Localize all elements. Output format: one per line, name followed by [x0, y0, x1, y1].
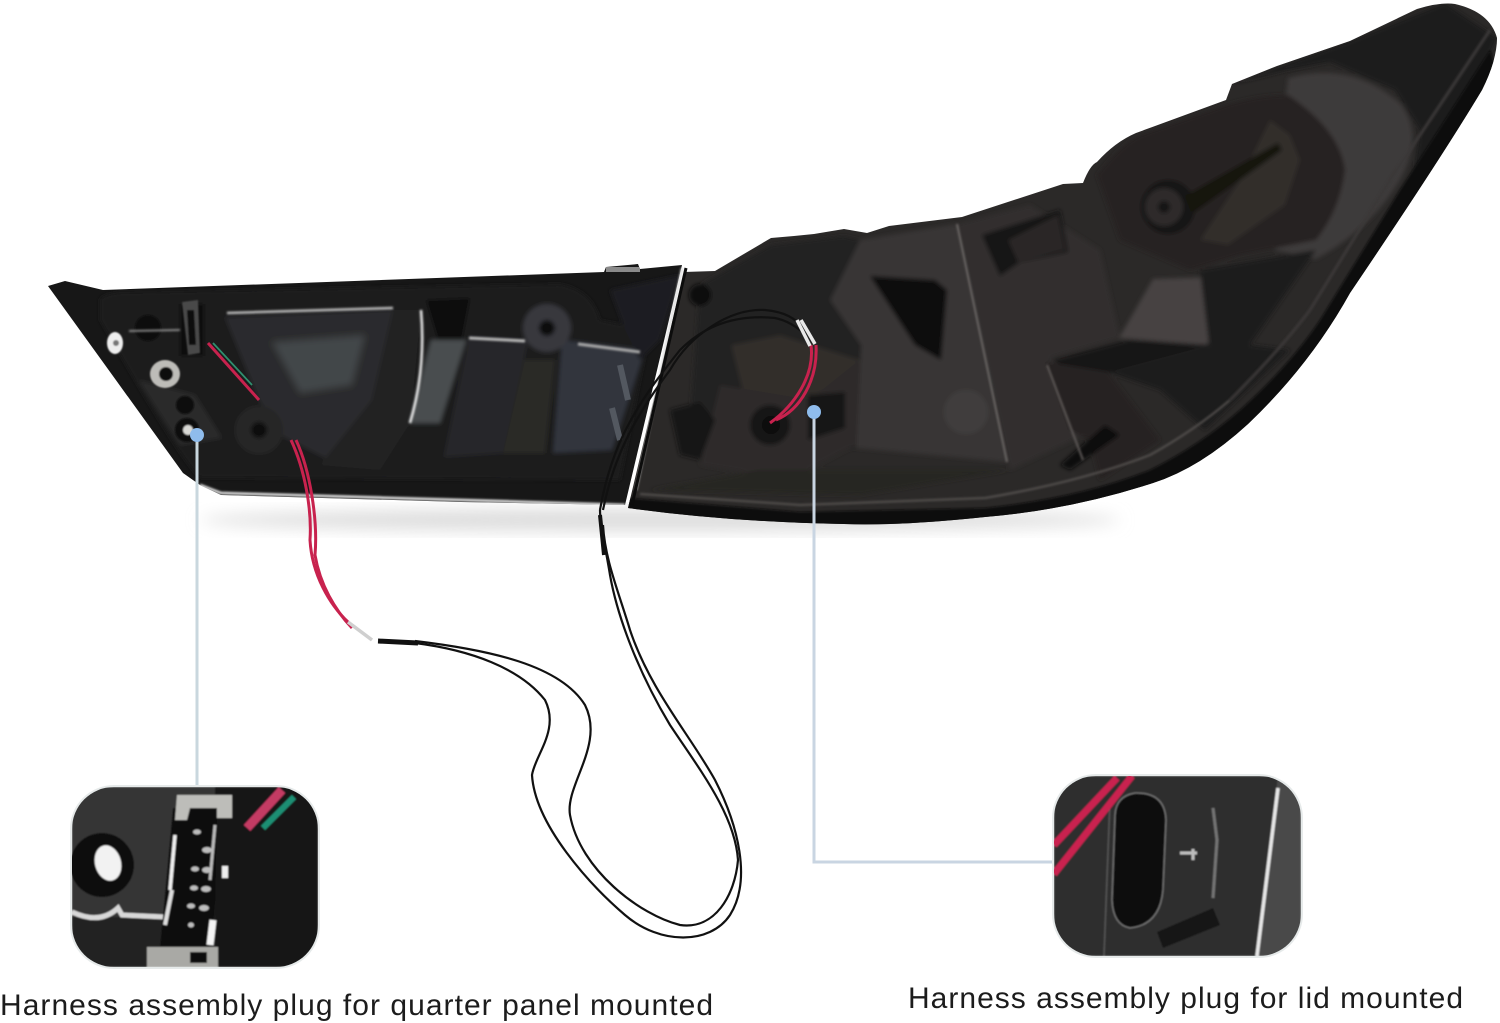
caption: lid plug: Harness assembly plug for lid mounted: [908, 982, 1463, 1015]
caption: quarter panel plug: Harness assembly plug for quarter panel mounted: [0, 989, 713, 1022]
panel: quarter-panel tail lamp housing: [48, 264, 686, 505]
top left area: [694, 238, 860, 414]
marker dot: [807, 405, 821, 419]
divider between the two housings: [636, 268, 682, 490]
highlights: [129, 308, 640, 505]
wire splices: [348, 320, 815, 640]
light grey block: [1119, 250, 1316, 345]
panel: lid-side tail lamp housing: [620, 3, 1500, 540]
wiring harness, red leads: [208, 343, 816, 628]
soft ground shadow under the lamp: [200, 509, 1120, 531]
inset photo: lid plug: [1052, 774, 1303, 958]
upper tip: [1232, 3, 1497, 200]
marker dot: [190, 428, 204, 442]
centre panel: [830, 224, 1007, 462]
dark block: [1046, 340, 1209, 372]
leader line to quarter panel plug: [190, 428, 204, 785]
leader line to lid plug: [807, 405, 1054, 862]
knob: [1141, 180, 1195, 234]
rim bands: [620, 50, 1500, 540]
dome inner: [1097, 95, 1345, 270]
wiring harness, black leads: [378, 310, 806, 938]
inset photo: quarter panel plug: [70, 785, 320, 969]
ridge lines: [957, 224, 1007, 462]
dome: [1275, 73, 1412, 259]
